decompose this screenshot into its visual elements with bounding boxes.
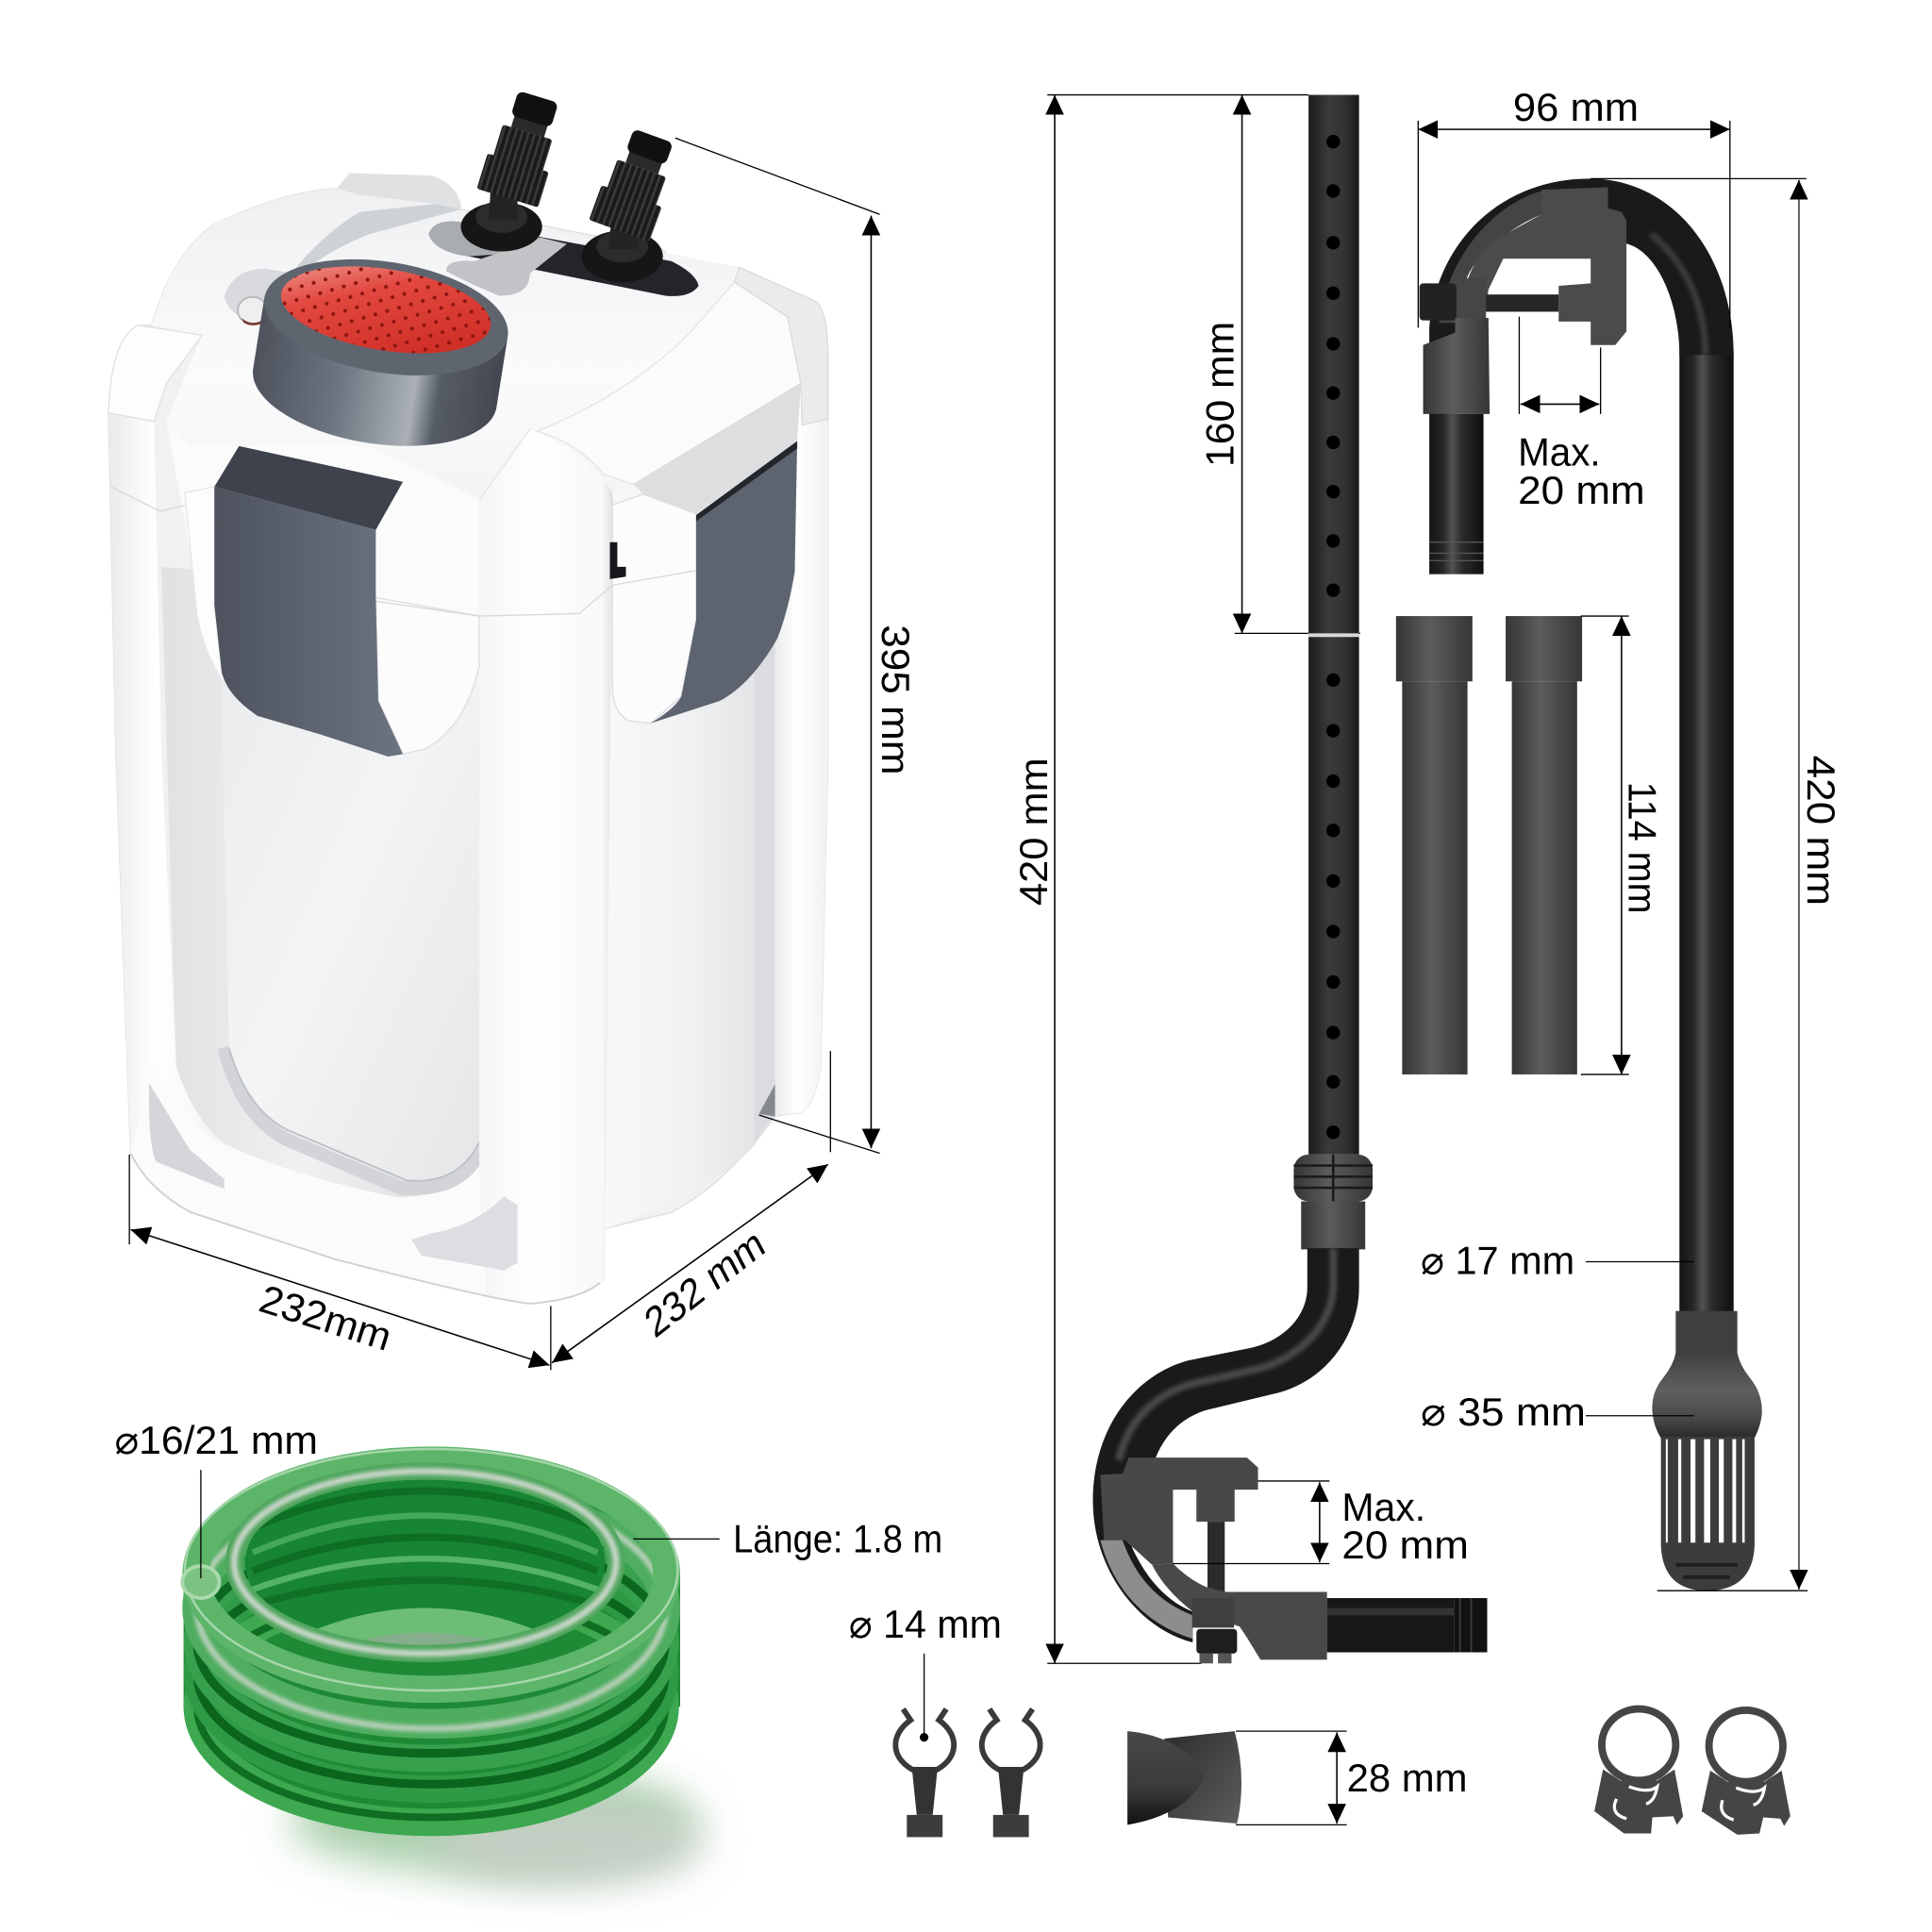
top inner turn highlight ring [234, 1472, 616, 1654]
inflow clamp [1420, 188, 1626, 345]
front white band [479, 429, 612, 1304]
outflow pipe connector [1293, 1155, 1373, 1249]
hose body [184, 1449, 680, 1836]
dimension: clamp max 20 mm horizontal: Max. [1518, 430, 1601, 475]
coil interior [245, 1472, 605, 1654]
dimension: clamp max 20 mm vertical [1173, 1481, 1469, 1567]
left dark tab [214, 446, 403, 757]
left ear [185, 487, 234, 696]
dimension: height 395 mm: 395 mm [874, 625, 918, 775]
label: diameter 14 mm [849, 1602, 1002, 1741]
dimension: depth 232 mm [552, 1164, 828, 1363]
dimension: 28 mm: 28 mm [1347, 1756, 1468, 1800]
hose clamp 1 [1594, 1709, 1683, 1834]
dimension: 160 mm: 160 mm [1197, 322, 1241, 467]
dimension: 96 mm: 96 mm [1513, 85, 1639, 129]
gray strap on top [293, 204, 460, 278]
dimension: 420 mm inflow pipe [1591, 178, 1843, 1591]
right corner clip [734, 267, 828, 425]
strainer slots [1666, 1440, 1744, 1542]
cut hose end [182, 1566, 219, 1598]
body silhouette [108, 174, 828, 1304]
outflow nozzle tube [1327, 1598, 1487, 1653]
dimension: clamp max 20 mm vertical: Max. [1341, 1485, 1425, 1529]
perforated spray bar [1308, 95, 1359, 1155]
carry cut-out right [411, 1196, 518, 1271]
green hose coil [182, 1449, 702, 1884]
carry cut-out left [149, 1083, 225, 1189]
dimension: width 232 mm: 232mm [255, 1276, 397, 1359]
nozzle funnel [1127, 1731, 1241, 1824]
top outer turn [185, 1449, 677, 1690]
label: hose length: Länge: 1.8 m [733, 1517, 942, 1561]
dimension: depth 232 mm: 232 mm [638, 1219, 772, 1346]
right shoulder [537, 282, 801, 484]
dimension: width 232 mm [129, 1155, 551, 1370]
dimension: clamp max 20 mm horizontal [1518, 317, 1645, 512]
bottom contour [130, 1154, 600, 1304]
front panel [219, 591, 479, 1181]
dimension: 420 mm outflow pipe: 420 mm [1011, 758, 1056, 906]
right frame strip [754, 358, 828, 1146]
inflow collar and lower tube [1424, 318, 1490, 575]
outflow clamp [1100, 1457, 1327, 1663]
middle ear [375, 597, 479, 754]
left corner post [108, 325, 202, 422]
inflow J tube [1429, 178, 1734, 1319]
seam lines [111, 487, 696, 616]
red cap [244, 243, 516, 462]
left frame strip [108, 413, 229, 1212]
right side panel [605, 419, 754, 1228]
front frame lower [130, 1059, 530, 1304]
top clip [338, 174, 460, 209]
hose port right [581, 125, 684, 282]
outflow S-bend tube [1093, 1248, 1359, 1642]
hose shadow [290, 1770, 702, 1884]
hose port left [460, 88, 569, 251]
port plate [429, 222, 699, 296]
top face [152, 189, 817, 499]
groove bottom shade [225, 1047, 479, 1189]
hose clamp 2 [1702, 1710, 1790, 1835]
dimension: 28 mm [1236, 1731, 1468, 1824]
perforation holes [1326, 135, 1340, 1140]
right ear [612, 494, 696, 724]
suction clip 1 [895, 1709, 954, 1837]
right shelf underside [633, 383, 801, 514]
sight glass [225, 269, 295, 325]
strainer [1652, 1311, 1762, 1591]
suction clip 2 [982, 1709, 1041, 1837]
label: hose diameter: ⌀16/21 mm [114, 1418, 318, 1462]
dimension: clamp max 20 mm horizontal: 20 mm [1518, 468, 1645, 512]
label: diameter 35 mm: ⌀ 35 mm [1421, 1390, 1586, 1434]
front groove [161, 567, 479, 1197]
dimension: 114 mm [1581, 616, 1665, 1074]
label: diameter 17 mm: ⌀ 17 mm [1421, 1239, 1574, 1283]
dimension: clamp max 20 mm vertical: 20 mm [1341, 1523, 1469, 1567]
label: diameter 14 mm: ⌀ 14 mm [849, 1602, 1002, 1646]
dimension: 96 mm [1418, 85, 1730, 327]
dimension: 420 mm outflow pipe [1011, 95, 1308, 1663]
extension tubes [1396, 616, 1582, 1074]
right dark tab [651, 441, 797, 724]
dimension: 114 mm: 114 mm [1621, 782, 1665, 913]
lower turns [197, 1487, 665, 1823]
latch notch [610, 542, 626, 579]
shoulder [166, 422, 479, 628]
dimension: 420 mm inflow pipe: 420 mm [1799, 756, 1843, 906]
filter body [108, 88, 828, 1304]
dimension: height 395 mm [675, 138, 918, 1154]
